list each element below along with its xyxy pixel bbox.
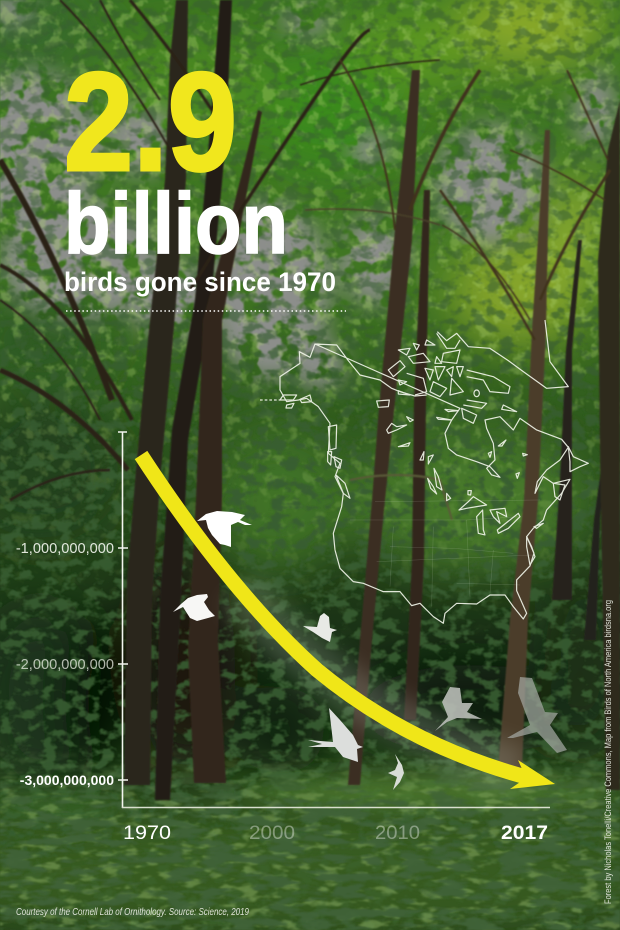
y axis labels: -2,000,000,000 <box>16 657 114 673</box>
inland and bay islands <box>398 440 527 501</box>
gulf of st lawrence and newfoundland <box>527 447 588 565</box>
birds <box>173 511 567 790</box>
greenland and baffin coast <box>437 320 568 388</box>
y axis labels <box>16 541 114 788</box>
bird 7 <box>507 677 567 753</box>
ground mist behind arrow <box>240 590 520 770</box>
title <box>64 43 336 297</box>
line chart: bird population decline <box>16 432 555 844</box>
y axis <box>118 432 128 808</box>
bird 1 <box>197 511 252 547</box>
bird 2 <box>173 594 215 621</box>
map of North America <box>260 320 588 623</box>
great lakes <box>459 497 543 535</box>
headline number: 2.9 <box>64 43 237 200</box>
dotted divider <box>66 310 346 312</box>
x axis labels: 2010 <box>375 822 420 844</box>
alaska border trail <box>260 398 280 402</box>
bird 4 <box>308 708 363 762</box>
photo credit: Forest by Nicholas Tonelli/Creative Commons, Map from Birds of North America birdsna.org <box>603 600 614 904</box>
us state lines <box>350 500 540 607</box>
bird 6 <box>435 687 482 731</box>
source credit: Courtesy of the Cornell Lab of Ornithology. Source: Science, 2019 <box>16 907 249 918</box>
sky patches through canopy <box>0 0 615 390</box>
x axis labels: 2017 <box>501 822 548 844</box>
headline unit: billion <box>64 176 288 272</box>
subtitle: birds gone since 1970 <box>64 267 336 297</box>
y axis labels: -3,000,000,000 <box>20 772 114 788</box>
arctic islands <box>377 333 517 423</box>
bird 3 <box>303 613 337 642</box>
x axis labels: 2000 <box>249 822 295 844</box>
decline arrow <box>141 455 555 789</box>
y axis labels: -1,000,000,000 <box>16 541 114 557</box>
bird 5 <box>388 754 404 790</box>
mainland outline <box>280 344 570 623</box>
x axis labels: 1970 <box>123 822 171 844</box>
x axis labels <box>123 822 548 844</box>
western islands <box>280 395 413 498</box>
x axis <box>122 806 550 808</box>
